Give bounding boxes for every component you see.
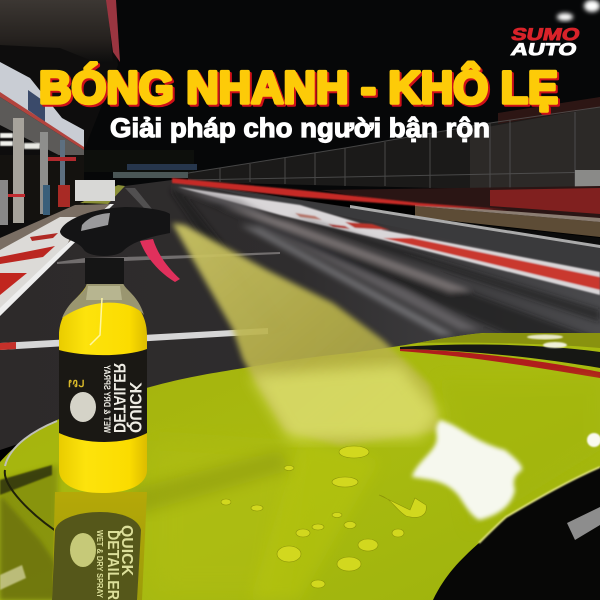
track surface xyxy=(0,180,600,450)
water droplets xyxy=(221,446,426,588)
spray bottle xyxy=(59,207,180,493)
wiper xyxy=(567,507,600,540)
label text: QUICK xyxy=(126,381,145,433)
hood reflection left xyxy=(0,465,58,600)
neck collar xyxy=(85,258,124,284)
highlight xyxy=(90,298,102,345)
subtitle: Giải pháp cho người bận rộn xyxy=(110,113,490,143)
pit wall xyxy=(75,180,115,201)
start line xyxy=(0,328,268,350)
bottle body xyxy=(59,283,147,493)
bright reflection on hood xyxy=(412,420,522,520)
spray mist xyxy=(172,223,440,445)
green verge xyxy=(80,185,125,204)
pit lane kerb xyxy=(0,217,78,313)
dark windshield corner xyxy=(433,467,600,600)
red kerb streak upper xyxy=(172,178,510,210)
car hood xyxy=(0,333,600,600)
bottle reflection xyxy=(52,492,147,600)
label xyxy=(59,349,147,442)
distant trees and sign xyxy=(84,150,194,172)
pit lane ground xyxy=(0,204,110,250)
bottle reflection: QUICK xyxy=(118,525,135,576)
kerb on right side of track xyxy=(178,187,600,295)
label text xyxy=(102,363,145,433)
label text: WET & DRY SPRAY xyxy=(102,365,112,433)
night sky xyxy=(0,0,600,200)
title: BÓNG NHANH - KHÔ LẸ xyxy=(41,64,560,115)
grandstand fence right xyxy=(188,97,600,192)
sponge graphic xyxy=(70,392,96,422)
pit building xyxy=(0,0,120,240)
title: BÓNG NHANH - KHÔ LẸ xyxy=(39,62,558,113)
glass shoulder xyxy=(62,283,144,318)
sprayer head xyxy=(60,207,170,256)
stadium floodlights xyxy=(557,0,600,21)
upper track lane xyxy=(200,186,600,276)
pink trigger xyxy=(140,239,180,282)
brand logo: AUTO xyxy=(509,39,579,59)
gold mark: เงา xyxy=(68,377,85,391)
brand logo xyxy=(506,24,582,59)
red barrier right xyxy=(320,186,600,222)
motion streaks xyxy=(170,185,600,340)
label text: DETAILER xyxy=(110,363,129,433)
brand logo: SUMO xyxy=(510,24,582,44)
